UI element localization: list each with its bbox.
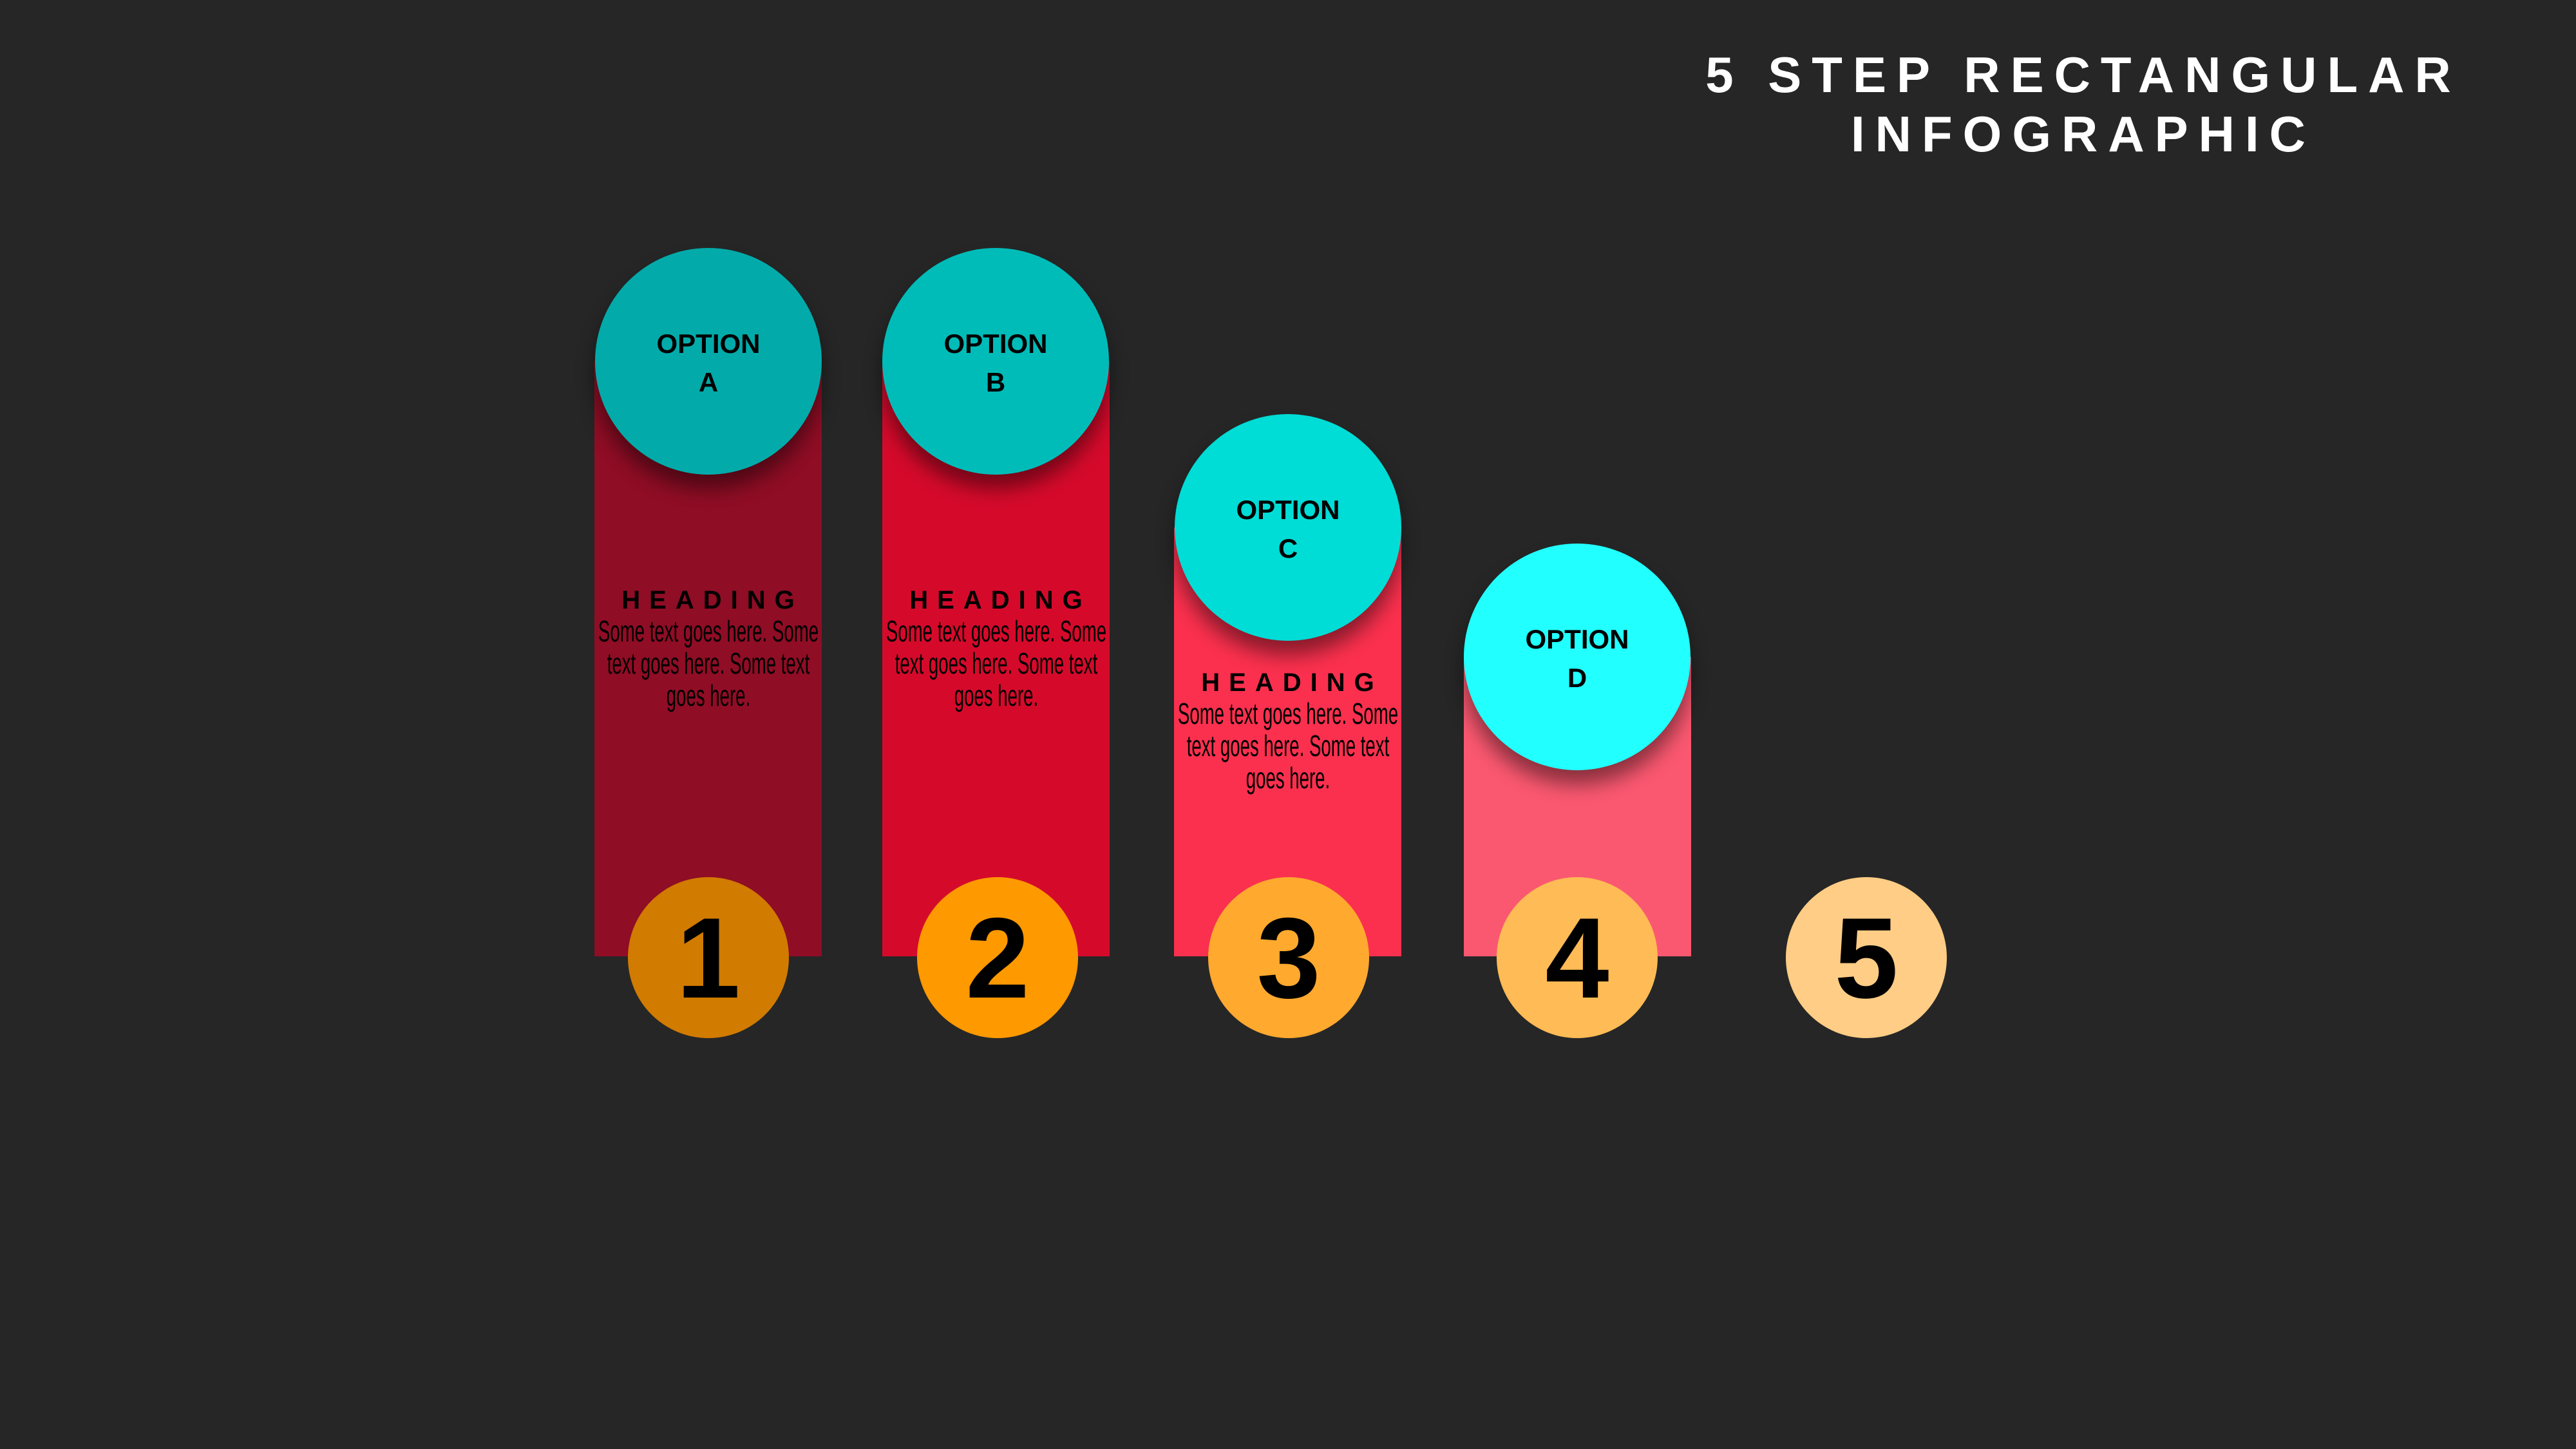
option A circle xyxy=(595,248,822,475)
option C circle: C xyxy=(1278,533,1298,564)
text block 2: text goes here. Some text xyxy=(895,647,1097,680)
option A circle: A xyxy=(699,367,718,397)
option A circle: OPTION xyxy=(656,328,760,359)
number 5: 5 xyxy=(1834,894,1899,1021)
number 2: 2 xyxy=(966,894,1029,1021)
text block 2: goes here. xyxy=(954,679,1038,712)
step 2 bar xyxy=(882,361,1110,956)
text block 2: Some text goes here. Some xyxy=(886,614,1106,648)
option D circle xyxy=(1464,544,1690,770)
option B circle xyxy=(882,248,1109,475)
text block 1: goes here. xyxy=(666,679,750,712)
step 1 bar xyxy=(594,361,822,956)
number 5 xyxy=(1786,877,1947,1038)
option D circle: D xyxy=(1567,663,1587,693)
number 4 xyxy=(1497,877,1658,1038)
option B circle: OPTION xyxy=(943,328,1047,359)
number 1: 1 xyxy=(676,894,741,1021)
number 3: 3 xyxy=(1257,894,1320,1021)
number 2 xyxy=(917,877,1078,1038)
text block 2 xyxy=(886,586,1106,712)
number 1 xyxy=(628,877,789,1038)
text block 2: HEADING xyxy=(909,586,1092,614)
text block 3: goes here. xyxy=(1245,761,1330,795)
text block 3: text goes here. Some text xyxy=(1186,729,1389,762)
text block 3 xyxy=(1177,668,1398,795)
option B circle: B xyxy=(986,367,1005,397)
title: INFOGRAPHIC xyxy=(1851,106,2316,162)
text block 3: Some text goes here. Some xyxy=(1177,697,1398,730)
text block 1: HEADING xyxy=(621,586,804,614)
text block 1: Some text goes here. Some xyxy=(598,614,819,648)
number 3 xyxy=(1208,877,1369,1038)
option C circle xyxy=(1175,414,1401,641)
step 4 bar xyxy=(1464,657,1691,956)
number 4: 4 xyxy=(1546,894,1609,1021)
text block 1: text goes here. Some text xyxy=(607,647,810,680)
title xyxy=(1705,46,2461,162)
text block 3: HEADING xyxy=(1201,668,1383,697)
option D circle: OPTION xyxy=(1525,624,1629,654)
title: 5 STEP RECTANGULAR xyxy=(1705,46,2461,103)
option C circle: OPTION xyxy=(1236,495,1340,525)
text block 1 xyxy=(598,586,819,712)
step 3 bar xyxy=(1174,527,1401,956)
